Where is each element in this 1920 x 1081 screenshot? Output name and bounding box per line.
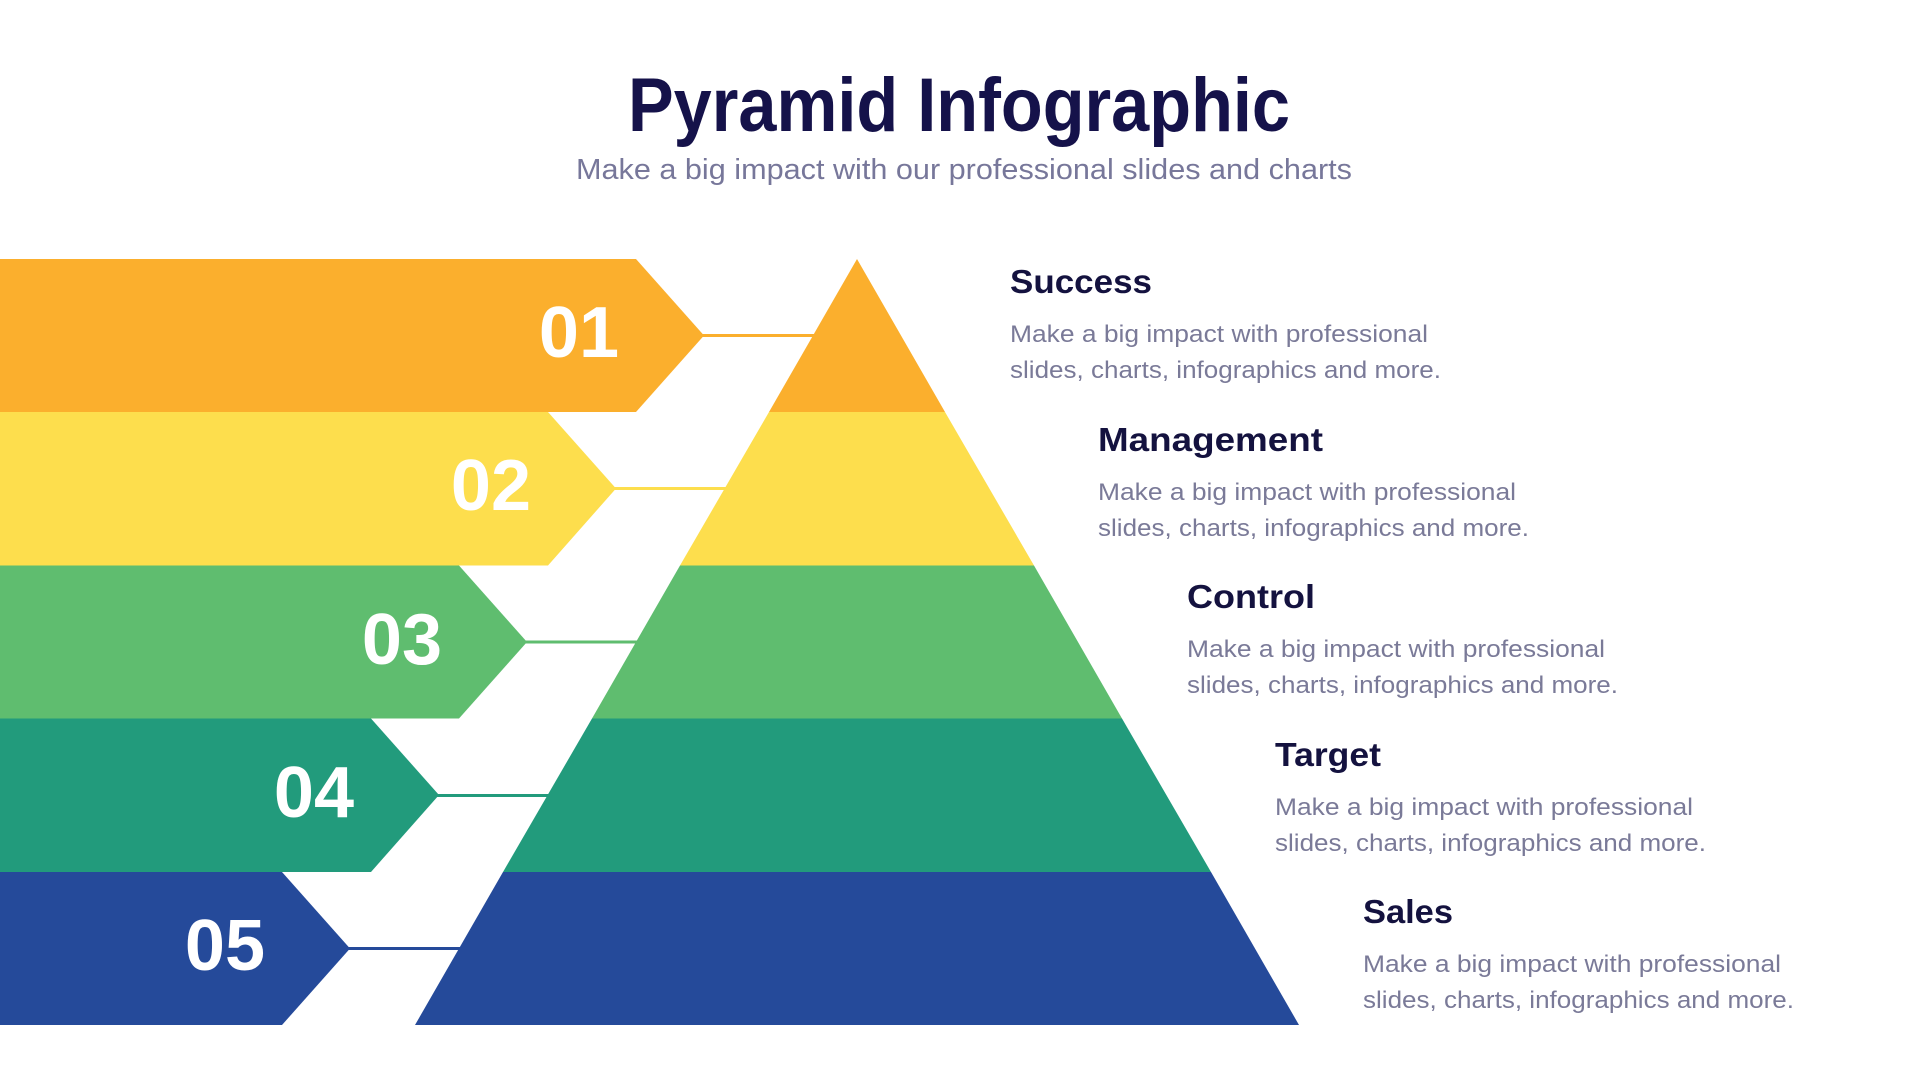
text block: Target: Target (1275, 736, 1381, 773)
text block: Control: Make a big impact with professional (1187, 636, 1605, 663)
subtitle: Make a big impact with our professional slides and charts (576, 154, 1352, 186)
text block: Target: Make a big impact with professional (1275, 794, 1693, 821)
text block: Success: Make a big impact with professional (1010, 321, 1428, 348)
text block: Sales: Make a big impact with professional (1363, 951, 1781, 978)
text block: Control: slides, charts, infographics and more. (1187, 672, 1618, 699)
arrow band 01: 01 (539, 293, 619, 373)
text block: Control (1187, 578, 1618, 699)
text block: Success: slides, charts, infographics and more. (1010, 357, 1441, 384)
text block: Management: Make a big impact with professional (1098, 479, 1516, 506)
arrow band 05 (0, 872, 466, 1025)
arrow band 04 (0, 718, 555, 872)
text block: Management: slides, charts, infographics and more. (1098, 515, 1529, 542)
arrow band 02 (0, 412, 732, 566)
arrow band 03 (0, 566, 643, 718)
arrow band 02: 02 (451, 446, 531, 526)
text block: Sales (1363, 893, 1794, 1014)
title: Pyramid Infographic (628, 63, 1290, 148)
text block: Target (1275, 736, 1706, 857)
text block: Management (1098, 421, 1529, 542)
text block: Success: Success (1010, 263, 1152, 300)
text block: Management: Management (1098, 421, 1323, 458)
arrow band 05: 05 (185, 906, 265, 986)
text block: Sales: Sales (1363, 893, 1453, 930)
text block: Control: Control (1187, 578, 1315, 615)
arrow band 01 (0, 259, 820, 412)
text block: Sales: slides, charts, infographics and more. (1363, 987, 1794, 1014)
arrow band 04: 04 (274, 753, 354, 833)
text block: Success (1010, 263, 1441, 384)
pyramid (415, 259, 1299, 1025)
arrow band 03: 03 (362, 600, 442, 680)
text block: Target: slides, charts, infographics and more. (1275, 830, 1706, 857)
